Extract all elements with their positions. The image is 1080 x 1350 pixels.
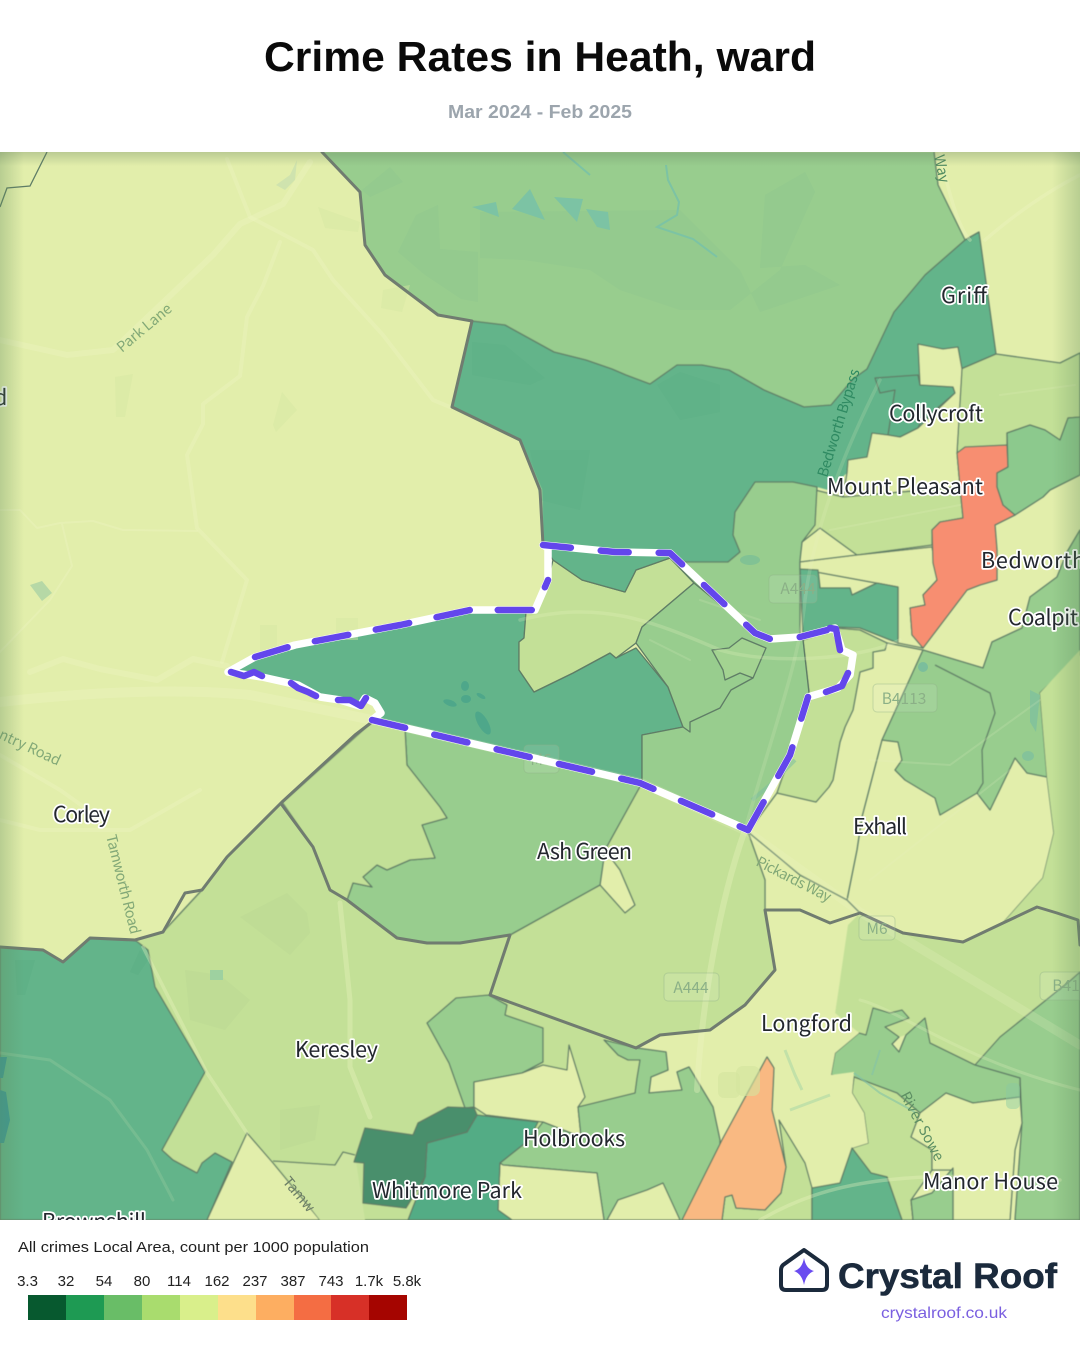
- main boundaries: thick grey ward borders: [0, 152, 1080, 1048]
- road numbers: A444: [673, 976, 709, 998]
- road name labels: Tamw: [278, 1172, 321, 1217]
- road numbers: A444: [780, 577, 816, 599]
- logo: Crystal Roof: [781, 1250, 1057, 1322]
- road numbers: [530, 577, 1080, 998]
- legend scale values: 32: [58, 1273, 74, 1290]
- legend scale values: [17, 1273, 422, 1290]
- place labels: Exhall: [853, 810, 907, 841]
- road name labels: Bedworth Bypass: [812, 366, 865, 479]
- map base: pale low-crime area: [0, 152, 1080, 1220]
- road name labels: Park Lane: [112, 298, 176, 357]
- road numbers: M6: [530, 748, 552, 770]
- place labels: Longford: [761, 1007, 852, 1038]
- road name labels: Way: [929, 153, 956, 185]
- road name labels: River Sowe: [896, 1087, 950, 1164]
- place labels: Coalpit: [1008, 601, 1078, 632]
- logo url: crystalroof.co.uk: [881, 1305, 1008, 1322]
- map edge vignette: [0, 152, 1080, 1220]
- legend scale values: 114: [167, 1273, 191, 1290]
- road numbers: M6: [866, 917, 888, 939]
- woodland, lakes and rivers: [0, 152, 1040, 1150]
- legend scale values: 1.7k: [355, 1273, 384, 1290]
- legend: [17, 1239, 422, 1320]
- roads: faint network: [0, 152, 1080, 1220]
- legend scale values: 80: [134, 1273, 150, 1290]
- ward boundary: white line with violet dashes: [228, 545, 853, 830]
- ward cells: inside Heath: [228, 545, 809, 832]
- road name labels: Pickards Way: [753, 851, 836, 907]
- subtitle: date range: Mar 2024 - Feb 2025: [448, 101, 632, 122]
- place labels: Griff: [941, 279, 988, 310]
- place labels: Manor House: [923, 1165, 1058, 1196]
- road numbers: B41: [1052, 974, 1080, 996]
- place labels: Holbrooks: [523, 1122, 625, 1153]
- place labels: [0, 279, 1080, 1236]
- legend scale values: 3.3: [17, 1273, 38, 1290]
- legend scale values: 162: [204, 1273, 230, 1290]
- legend title: All crimes Local Area, count per 1000 population: [18, 1239, 369, 1256]
- legend scale values: 54: [96, 1273, 112, 1290]
- legend scale values: 387: [280, 1273, 306, 1290]
- place labels: Ash Green: [537, 835, 632, 866]
- place labels: Brownshill: [42, 1205, 146, 1236]
- road name labels: Tamworth Road: [101, 832, 146, 936]
- place labels: Collycroft: [889, 397, 983, 428]
- icon: house with star: [781, 1250, 827, 1290]
- legend scale values: 237: [242, 1273, 268, 1290]
- thin top-left area boundary: [0, 152, 47, 207]
- road shields: [524, 575, 1080, 1001]
- title: Crime Rates in Heath, ward: [264, 33, 816, 80]
- legend scale values: 743: [318, 1273, 344, 1290]
- legend colour bar: [28, 1295, 407, 1320]
- road numbers: B4113: [882, 687, 926, 709]
- place labels: Whitmore Park: [372, 1174, 522, 1205]
- area polygons: crime-rate cells: [0, 152, 1080, 1220]
- road name labels: [0, 153, 956, 1217]
- legend scale values: 5.8k: [393, 1273, 422, 1290]
- place labels: Corley: [53, 798, 110, 829]
- logo wordmark: Crystal Roof: [838, 1257, 1057, 1296]
- place labels: Mount Pleasant: [827, 470, 983, 501]
- place labels: Keresley: [295, 1033, 378, 1064]
- lakes inside the ward: [444, 681, 491, 734]
